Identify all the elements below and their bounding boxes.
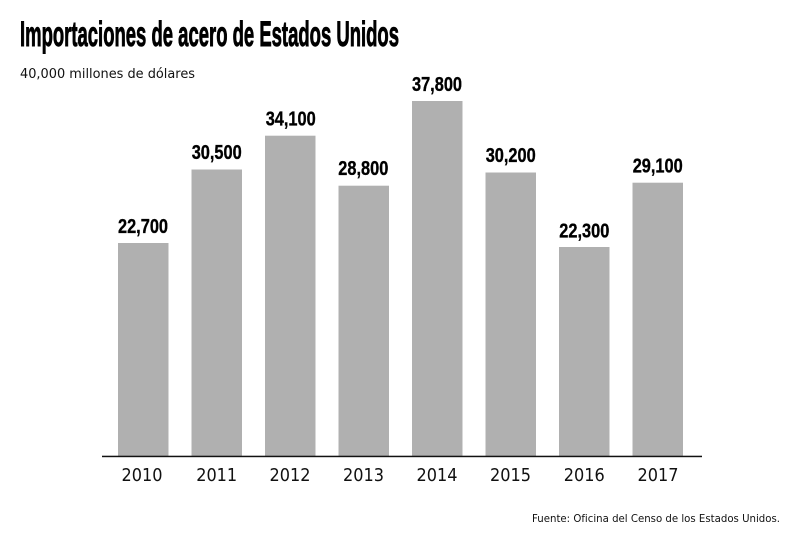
value labels: 22,700 [118, 216, 168, 238]
value labels: 22,300 [559, 220, 609, 242]
value labels: 37,800 [412, 74, 462, 96]
year labels: 2013 [343, 465, 384, 486]
bars [118, 101, 683, 456]
value labels [118, 74, 683, 242]
source note: Fuente: Oficina del Censo de los Estados Unidos. [532, 513, 780, 525]
axis line [102, 456, 702, 457]
value labels: 34,100 [266, 108, 316, 130]
year labels: 2012 [270, 465, 310, 486]
value labels: 30,200 [486, 145, 536, 167]
year labels: 2011 [196, 465, 237, 486]
value labels: 28,800 [338, 158, 388, 180]
value labels: 29,100 [633, 156, 683, 178]
year labels: 2015 [490, 465, 531, 486]
value labels: 30,500 [192, 142, 242, 164]
year labels: 2016 [564, 465, 605, 486]
year labels: 2017 [638, 465, 678, 486]
year labels: 2014 [416, 465, 458, 486]
bar chart [102, 74, 702, 486]
year labels [122, 465, 678, 486]
year labels: 2010 [122, 465, 162, 486]
title: Importaciones de acero de Estados Unidos [20, 15, 399, 54]
subtitle: 40,000 millones de dólares [20, 67, 195, 82]
